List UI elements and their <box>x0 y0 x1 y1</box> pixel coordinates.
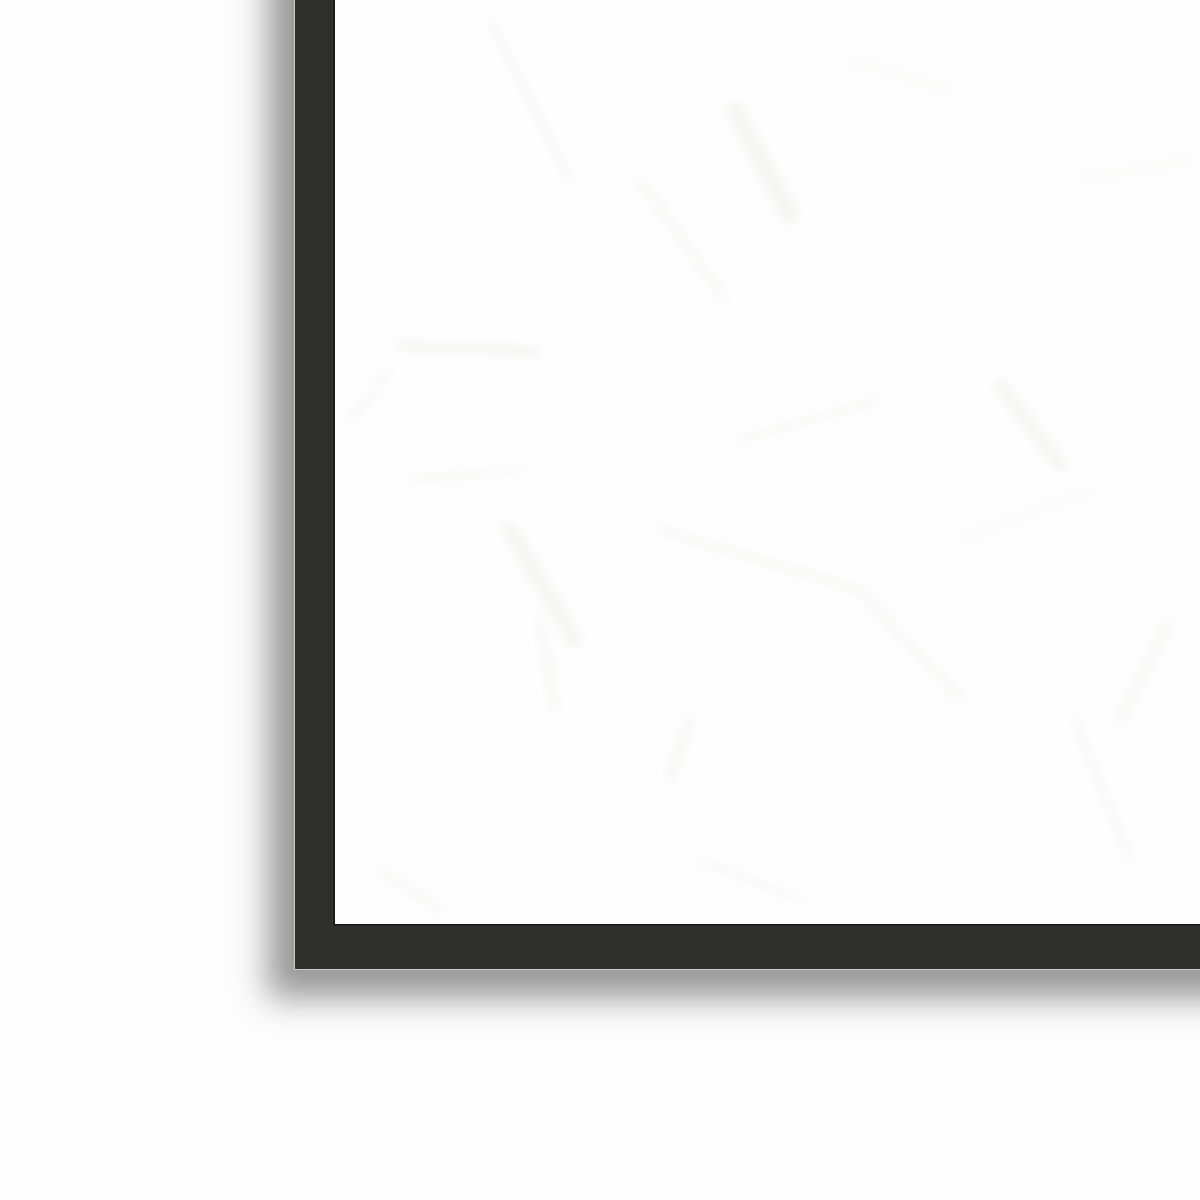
black frame <box>295 0 1200 969</box>
white canvas with faint brush texture <box>335 0 1200 924</box>
frame drop shadow <box>295 0 1200 969</box>
